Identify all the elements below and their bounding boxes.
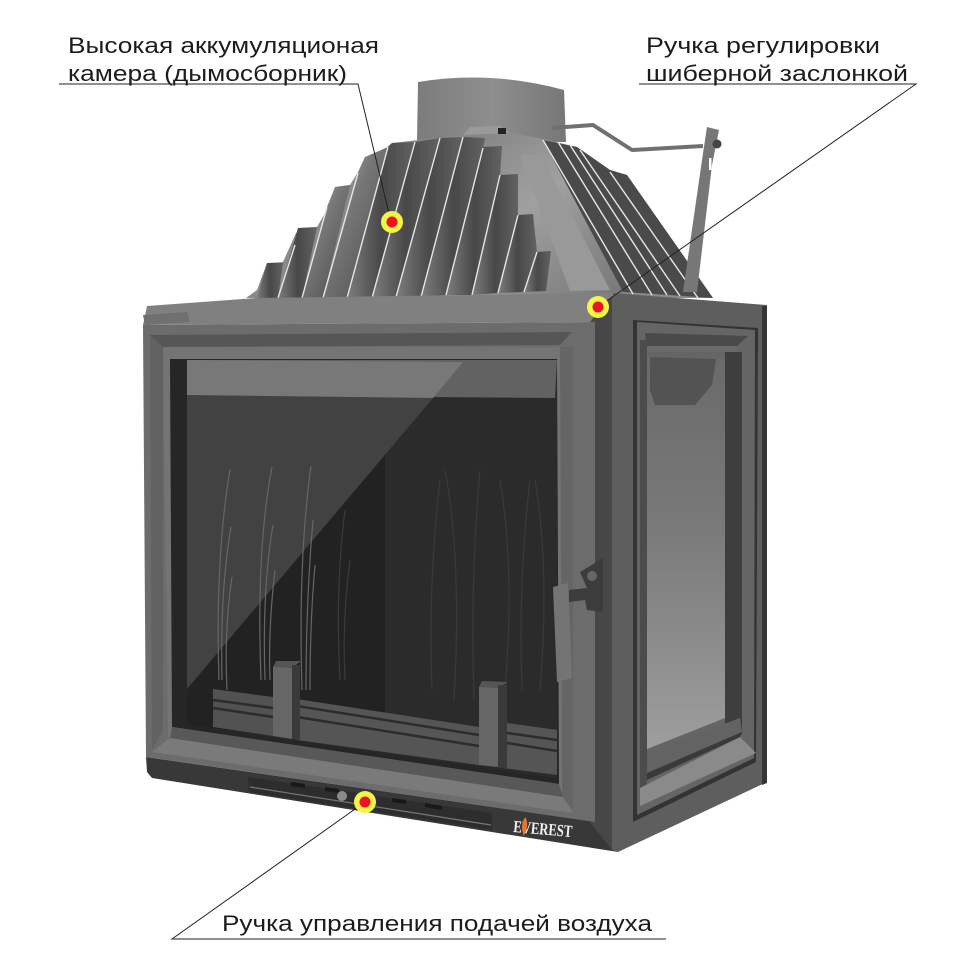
side glass [647,357,725,749]
glass top band [187,360,557,398]
side door frame [633,320,758,822]
door glass [187,360,557,778]
door frame [143,322,595,822]
door inner lip [163,347,566,800]
left top latch [143,312,190,325]
side edge strip [762,306,767,785]
side door lower bevel [640,718,756,806]
leader line: damper handle [598,84,916,307]
door handle [553,558,603,682]
label: damper handle: Ручка регулировки [646,33,880,58]
firebox back wall [187,398,385,750]
leader line: air supply handle [172,802,666,939]
door upper recess [150,332,572,347]
label: smoke chamber: камера (дымосборник) [68,61,347,86]
label: damper handle: шиберной заслонкой [646,61,908,86]
glass reflection [187,395,433,689]
label: damper handle [646,33,908,86]
logo: EVEREST: EVEREST [513,817,574,841]
hood [246,126,713,298]
label: air supply handle: Ручка управления подачей воздуха [222,911,653,936]
fireplace photo illustration [143,78,767,852]
air slider [248,777,492,830]
door lower bevel [152,738,573,813]
leader line: smoke chamber [59,84,391,222]
front base [146,757,618,852]
marker: air supply handle [354,791,376,813]
damper handle [552,125,722,292]
log grate [213,661,557,775]
top plate [143,293,613,325]
flue collar [417,78,566,142]
side face [613,293,767,852]
logo: EVEREST [513,816,574,841]
marker: smoke chamber [381,211,403,233]
label: smoke chamber: Высокая аккумуляционая [68,33,379,58]
corner column [590,296,633,852]
marker: damper handle [587,296,609,318]
label: smoke chamber [68,33,379,86]
